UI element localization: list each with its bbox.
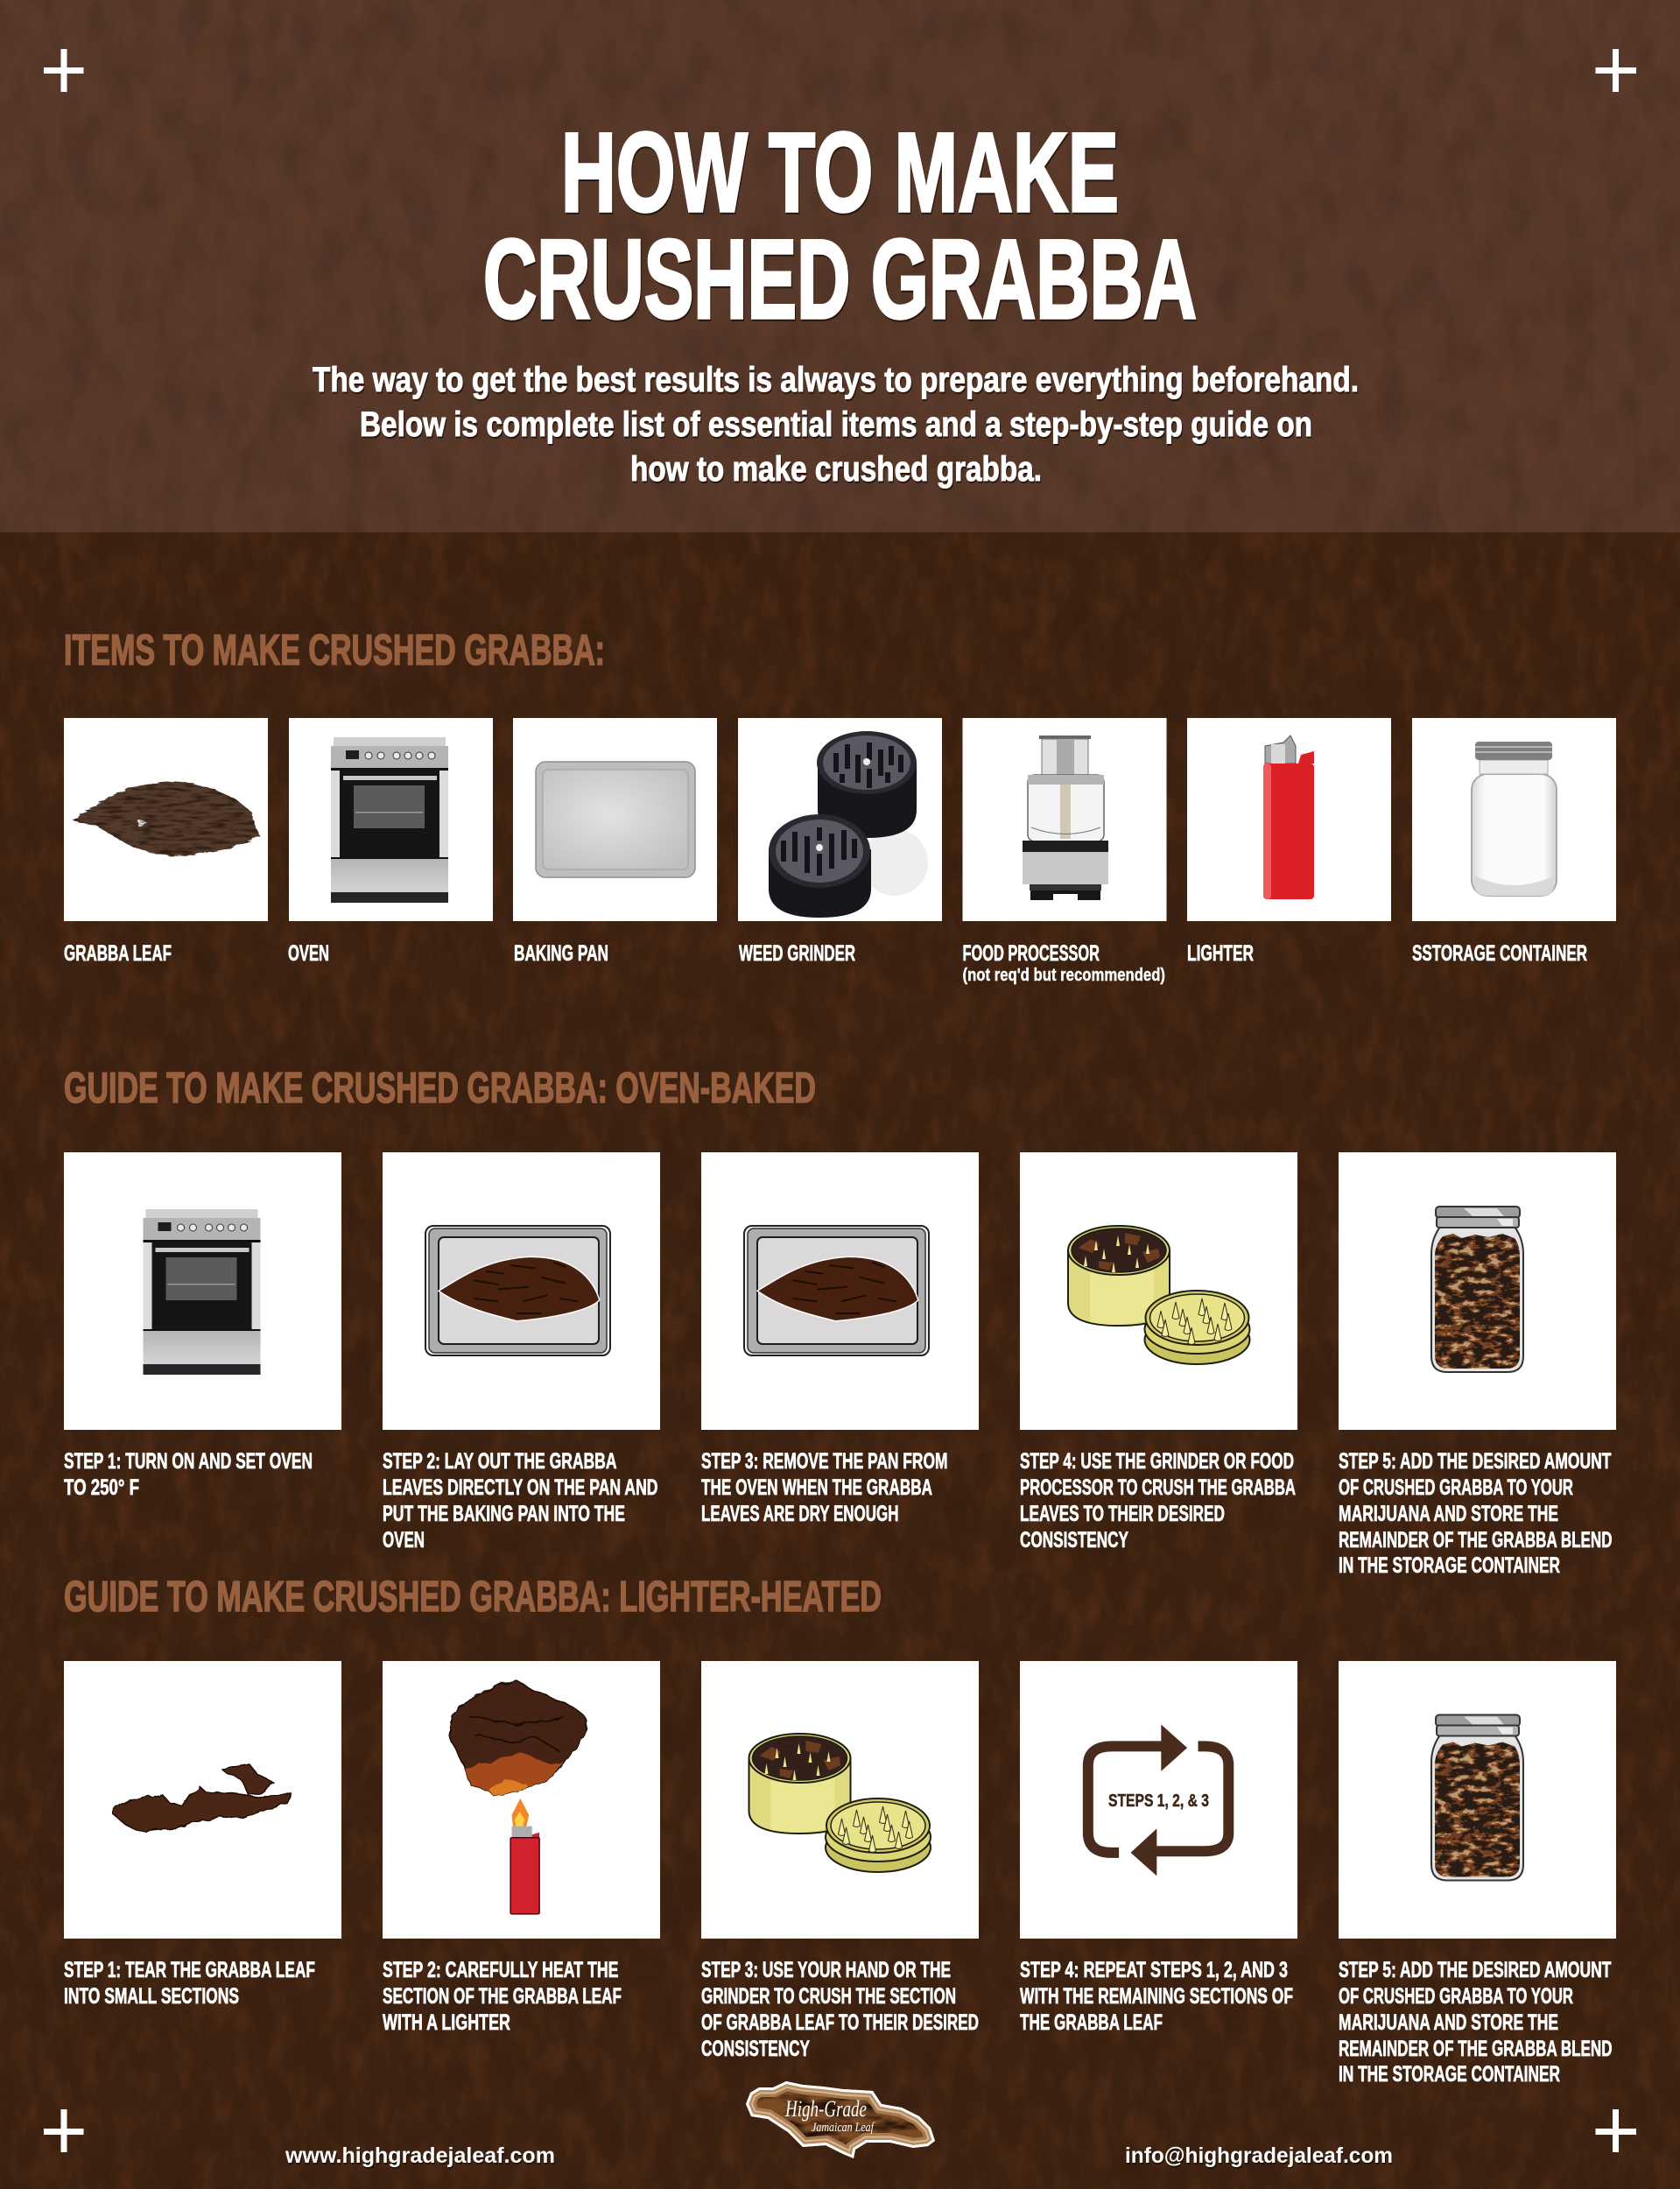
text: oven step 5: MARIJUANA AND STORE THE <box>1339 1502 1558 1526</box>
text: lighter step 2: SECTION OF THE GRABBA LEAF <box>383 1984 622 2009</box>
text: lighter step 4 <box>1020 1958 1293 2035</box>
text: oven step 2: STEP 2: LAY OUT THE GRABBA <box>383 1449 616 1474</box>
subtitle text: Below is complete list of essential items and a step-by-step guide on <box>360 405 1312 444</box>
icon: corner cross bottom left <box>44 2109 84 2152</box>
item: storage container <box>1412 718 1616 966</box>
icon: glass jar photo <box>1472 742 1557 896</box>
icon: corner cross top right <box>1595 49 1636 92</box>
footer: website: www.highgradejaleaf.com <box>285 2143 555 2168</box>
heading: items: ITEMS TO MAKE CRUSHED GRABBA: <box>64 627 605 674</box>
text: oven step 5 <box>1339 1449 1613 1578</box>
text: lighter step 5: MARIJUANA AND STORE THE <box>1339 2010 1558 2035</box>
icon: pan with leaf <box>425 1226 610 1355</box>
subtitle text <box>313 361 1359 489</box>
text: lighter step 5 <box>1339 1958 1613 2087</box>
text: oven step 5: OF CRUSHED GRABBA TO YOUR <box>1339 1475 1573 1500</box>
text: oven step 4 <box>1020 1449 1296 1552</box>
text: lighter step 4: STEP 4: REPEAT STEPS 1, 2, AND 3 <box>1020 1958 1288 1982</box>
text: lighter step 4: THE GRABBA LEAF <box>1020 2010 1163 2035</box>
label inside arrows: STEPS 1, 2, & 3 <box>1108 1791 1209 1811</box>
item: food processor <box>963 718 1166 985</box>
icon: weed grinder photo <box>769 731 928 918</box>
step panel: oven step 3 <box>701 1152 979 1526</box>
item: food processor: (not req'd but recommended) <box>963 966 1165 985</box>
subtitle text: The way to get the best results is always to prepare everything beforehand. <box>313 361 1359 399</box>
step panel: lighter step 5 <box>1339 1661 1616 2087</box>
text: lighter step 1 <box>64 1958 315 2009</box>
icon: corner cross bottom right <box>1595 2109 1636 2152</box>
text: oven step 3 <box>701 1449 947 1526</box>
logo: Jamaican Leaf <box>812 2121 875 2135</box>
heading: oven-baked guide: GUIDE TO MAKE CRUSHED GRABBA: OVEN-BAKED <box>64 1065 816 1112</box>
step panel: lighter step 3 <box>701 1661 979 2061</box>
step panel: oven step 2 <box>383 1152 660 1552</box>
icon: yellow grinder <box>1068 1226 1250 1364</box>
text: lighter step 4: WITH THE REMAINING SECTIONS OF <box>1020 1984 1293 2009</box>
header band <box>0 0 1680 532</box>
text: lighter step 3: GRINDER TO CRUSH THE SECTION <box>701 1984 956 2009</box>
text: lighter step 5: OF CRUSHED GRABBA TO YOUR <box>1339 1984 1573 2009</box>
item: oven <box>288 718 493 966</box>
icon: grabba leaf photo <box>73 782 260 856</box>
item: weed grinder: WEED GRINDER <box>739 941 855 966</box>
heading: lighter-heated guide: GUIDE TO MAKE CRUSHED GRABBA: LIGHTER-HEATED <box>64 1573 882 1621</box>
item: grabba leaf: GRABBA LEAF <box>64 941 172 966</box>
icon: corner cross top left <box>44 49 84 92</box>
text: oven step 1: STEP 1: TURN ON AND SET OVEN <box>64 1449 313 1474</box>
text: oven step 4: STEP 4: USE THE GRINDER OR FOOD <box>1020 1449 1294 1474</box>
icon: yellow grinder <box>749 1734 931 1872</box>
text: lighter step 1: INTO SMALL SECTIONS <box>64 1984 239 2009</box>
step panel: oven step 1 <box>64 1152 341 1500</box>
subtitle text: how to make crushed grabba. <box>630 450 1042 489</box>
icon: oven photo <box>331 737 448 903</box>
text: oven step 4: PROCESSOR TO CRUSH THE GRABBA <box>1020 1475 1296 1500</box>
item: baking pan: BAKING PAN <box>514 941 608 966</box>
text: lighter step 5: IN THE STORAGE CONTAINER <box>1339 2062 1560 2087</box>
text: oven step 2: PUT THE BAKING PAN INTO THE <box>383 1502 625 1526</box>
text: lighter step 2: WITH A LIGHTER <box>383 2010 510 2035</box>
text: oven step 3: LEAVES ARE DRY ENOUGH <box>701 1502 898 1526</box>
text: oven step 2: LEAVES DIRECTLY ON THE PAN AND <box>383 1475 658 1500</box>
item: oven: OVEN <box>288 941 329 966</box>
logo <box>746 2081 935 2158</box>
icon: pan with leaf <box>744 1226 929 1355</box>
title <box>483 110 1197 342</box>
step panel: oven step 5 <box>1339 1152 1616 1578</box>
icon: torn leaf <box>113 1764 292 1832</box>
logo: High-Grade <box>784 2096 867 2122</box>
icon: lighter photo <box>1263 736 1314 899</box>
icon: repeat arrows <box>1088 1725 1228 1876</box>
text: lighter step 2 <box>383 1958 622 2035</box>
step panel: lighter step 4 <box>1020 1661 1297 2035</box>
text: oven step 4: CONSISTENCY <box>1020 1528 1128 1552</box>
text: oven step 4: LEAVES TO THEIR DESIRED <box>1020 1502 1225 1526</box>
text: oven step 3: THE OVEN WHEN THE GRABBA <box>701 1475 932 1500</box>
text: lighter step 3 <box>701 1958 979 2061</box>
text: oven step 2 <box>383 1449 658 1552</box>
title: CRUSHED GRABBA <box>483 217 1197 342</box>
text: oven step 5: IN THE STORAGE CONTAINER <box>1339 1553 1560 1578</box>
text: lighter step 3: CONSISTENCY <box>701 2037 810 2061</box>
icon: leaf heated by lighter <box>449 1681 587 1914</box>
text: oven step 1 <box>64 1449 313 1500</box>
icon: filled jar <box>1431 1207 1523 1372</box>
text: oven step 1: TO 250° F <box>64 1475 139 1500</box>
icon: filled jar <box>1431 1714 1523 1881</box>
footer: email: info@highgradejaleaf.com <box>1125 2143 1393 2168</box>
title: HOW TO MAKE <box>561 110 1119 236</box>
step panel: oven step 4 <box>1020 1152 1297 1552</box>
text: lighter step 3: STEP 3: USE YOUR HAND OR THE <box>701 1958 951 1982</box>
icon: baking pan photo <box>536 762 695 877</box>
item: grabba leaf <box>64 718 268 966</box>
item: lighter: LIGHTER <box>1187 941 1254 966</box>
item: storage container: SSTORAGE CONTAINER <box>1412 941 1587 966</box>
icon: oven <box>144 1209 261 1375</box>
step panel: lighter step 2 <box>383 1661 660 2035</box>
text: lighter step 2: STEP 2: CAREFULLY HEAT THE <box>383 1958 618 1982</box>
text: oven step 2: OVEN <box>383 1528 425 1552</box>
item: baking pan <box>513 718 717 966</box>
text: lighter step 1: STEP 1: TEAR THE GRABBA LEAF <box>64 1958 315 1982</box>
icon: food processor photo <box>1023 736 1108 900</box>
text: lighter step 3: OF GRABBA LEAF TO THEIR DESIRED <box>701 2010 979 2035</box>
item: lighter <box>1187 718 1391 966</box>
item: food processor: FOOD PROCESSOR <box>963 941 1100 966</box>
step panel: lighter step 1 <box>64 1661 341 2009</box>
text: oven step 3: STEP 3: REMOVE THE PAN FROM <box>701 1449 947 1474</box>
item: weed grinder <box>738 718 942 966</box>
